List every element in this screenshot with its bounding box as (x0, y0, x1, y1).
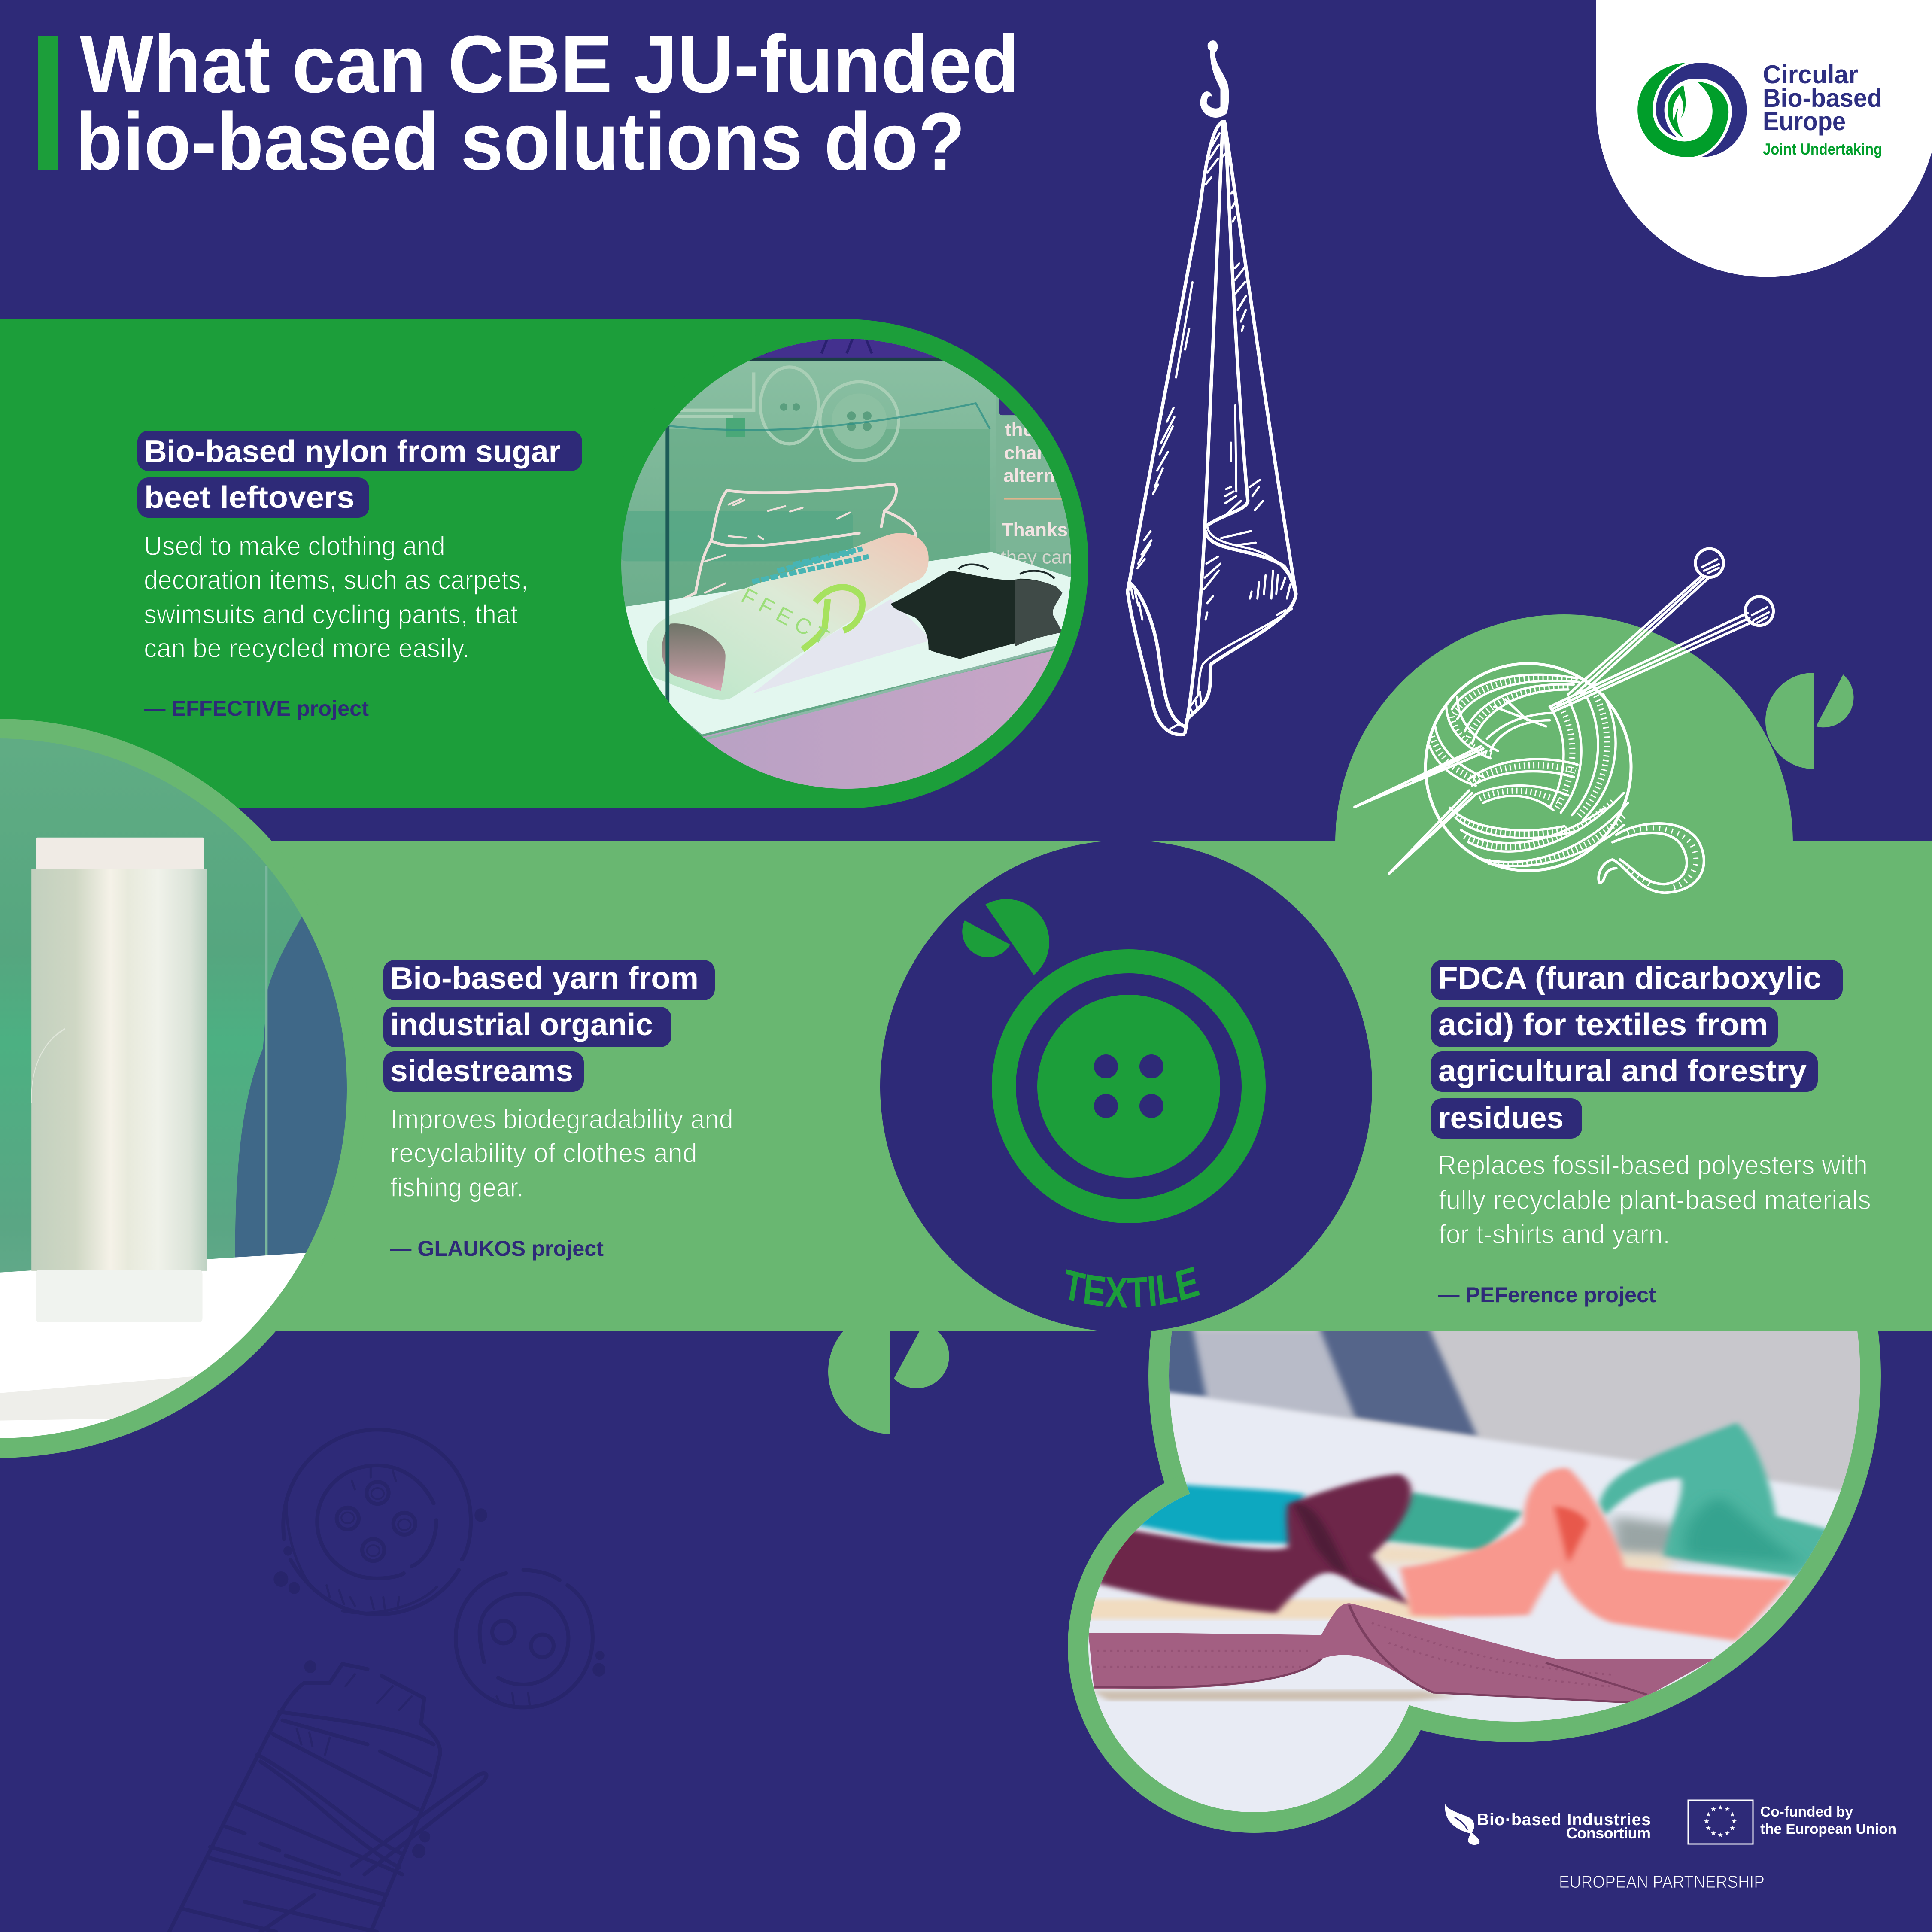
bobbin bottom flange (36, 1270, 203, 1322)
panel: dark green nylon card (0, 319, 1088, 808)
label: TEXTILE: TEXTILE (1060, 1258, 1203, 1317)
text: European partnership: EUROPEAN PARTNERSHIP (1559, 1872, 1765, 1892)
text: co-funded by the EU (1760, 1804, 1896, 1837)
text block: FDCA: Replaces fossil-based polyesters with (1438, 1151, 1868, 1180)
logo: EU flag (1688, 1800, 1753, 1844)
text block: bio-based nylon: swimsuits and cycling pants, that (144, 600, 518, 629)
text block: bio-based yarn: Bio-based yarn from (390, 961, 699, 996)
yarn strands (1430, 674, 1628, 866)
text block: bio-based nylon: Bio-based nylon from sugar (144, 434, 561, 469)
text block: bio-based yarn (383, 960, 733, 1261)
faint button large (276, 1430, 485, 1614)
text: co-funded by the EU: Co-funded by (1760, 1804, 1853, 1820)
text block: bio-based nylon (137, 431, 582, 720)
text block: FDCA: acid) for textiles from (1438, 1008, 1768, 1042)
hook (1200, 40, 1229, 118)
text block: FDCA: residues (1438, 1101, 1564, 1135)
text block: bio-based yarn: Improves biodegradability and (390, 1105, 733, 1134)
panel: light green band (0, 841, 1932, 1331)
text block: bio-based yarn: — GLAUKOS project (390, 1236, 604, 1261)
photo: towel and swimsuit display: F F E C T (738, 583, 833, 650)
logo wordmark: Joint Undertaking (1763, 140, 1882, 158)
logo: Bio-based Industries Consortium: Consortium (1566, 1824, 1651, 1842)
bottom photo frame (1068, 1010, 1881, 1833)
title (76, 19, 1019, 187)
CBE logo mark (1637, 63, 1747, 157)
logo: Bio-based Industries Consortium: Bio·based Industries (1477, 1810, 1651, 1829)
black swimsuit (891, 571, 1062, 659)
photo text fragments: they can (1001, 547, 1072, 568)
logo wordmark (1763, 60, 1882, 158)
text block: FDCA (1431, 960, 1871, 1307)
photo: coloured knitted textile samples (1052, 1309, 1932, 1905)
pillow sketch (684, 484, 916, 598)
text block: bio-based nylon: beet leftovers (144, 480, 355, 515)
faint button small (456, 1570, 603, 1707)
knitting needles (1355, 549, 1774, 874)
faint doodle: buttons and thread spool (169, 1430, 603, 1932)
text block: FDCA: FDCA (furan dicarboxylic (1438, 961, 1821, 996)
icon: hanging towel on hook (1127, 40, 1296, 735)
text block: FDCA: for t-shirts and yarn. (1439, 1220, 1670, 1249)
text block: bio-based nylon: can be recycled more easily. (144, 634, 470, 663)
text block: FDCA: agricultural and forestry (1438, 1054, 1807, 1088)
text block: bio-based nylon: Used to make clothing and (144, 532, 445, 561)
photo text fragments: chara (1004, 443, 1055, 464)
logo wordmark: Bio-based (1763, 84, 1882, 112)
text block: bio-based yarn: recyclability of clothes and (390, 1139, 697, 1168)
icon: ball of yarn with knitting needles (1355, 549, 1774, 893)
photo text fragments: alterna (1003, 465, 1066, 486)
photo text fragments (1001, 422, 1071, 565)
bobbin top flange (36, 838, 204, 873)
photo text fragments: the (1005, 419, 1033, 440)
text block: bio-based yarn: industrial organic (390, 1008, 653, 1042)
logo wordmark: Circular (1763, 60, 1858, 89)
text block: bio-based yarn: fishing gear. (390, 1173, 524, 1203)
decorative half-leaf: upper right (1765, 673, 1854, 769)
knitting bump (1335, 614, 1793, 1072)
yarn tail (1598, 823, 1704, 893)
faint thread spool (169, 1662, 486, 1932)
text block: FDCA: — PEFerence project (1438, 1283, 1656, 1307)
title: What can CBE JU-funded (80, 19, 1019, 110)
photo: bio-based yarn bobbin (0, 708, 368, 1448)
icon: button (1004, 961, 1254, 1211)
rolled towel (647, 533, 929, 700)
logo: Bio-based Industries Consortium (1445, 1804, 1651, 1845)
text block: FDCA: fully recyclable plant-based materials (1439, 1185, 1871, 1215)
photo: towel and swimsuit display (621, 339, 1071, 789)
centre circle (880, 840, 1372, 1332)
title: bio-based solutions do? (76, 96, 965, 187)
text: co-funded by the EU: the European Union (1760, 1821, 1896, 1837)
title accent bar (38, 36, 58, 170)
text block: bio-based nylon: — EFFECTIVE project (144, 696, 369, 720)
icon: leaf on button (962, 899, 1049, 975)
logo panel (1596, 0, 1932, 277)
table top (623, 552, 1080, 735)
bobbin body (31, 869, 207, 1271)
photo frame: yarn bobbin (0, 719, 367, 1458)
text block: bio-based yarn: sidestreams (390, 1054, 573, 1088)
text block: bio-based nylon: decoration items, such as carpets, (144, 565, 528, 595)
logo wordmark: Europe (1763, 107, 1846, 136)
decorative half-leaf: bottom centre (828, 1309, 949, 1434)
photo text fragments: Thanks to (1002, 519, 1091, 541)
